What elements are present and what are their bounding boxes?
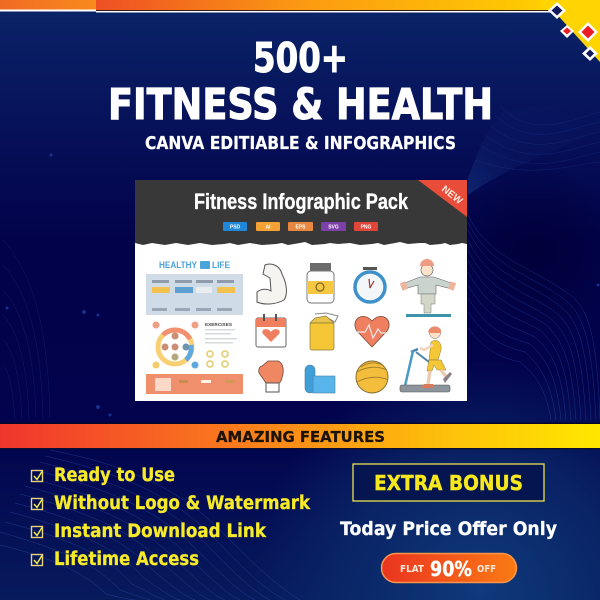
format badges: EPS: [295, 224, 306, 230]
icon: heart with pulse: [355, 316, 389, 347]
title: Fitness & Health: FITNESS & HEALTH: [108, 81, 493, 130]
icon: yoga mat: [305, 365, 335, 393]
offer text: Today Price Offer Only: [340, 518, 558, 540]
format badges: PNG: [361, 224, 372, 230]
icon: boxing glove: [259, 361, 283, 392]
icon: arm: [257, 264, 286, 304]
format badges: AI: [266, 224, 271, 230]
features banner: [0, 422, 600, 450]
discount pill: FLAT: [400, 564, 424, 575]
extra bonus box: [353, 464, 544, 501]
card header with torn edge: [135, 180, 467, 245]
icon: water bottle: [310, 313, 338, 350]
subtitle: CANVA EDITIABLE & INFOGRAPHICS: [145, 133, 456, 154]
card heading: Fitness Infographic Pack: [194, 189, 409, 214]
mini infographic: [146, 260, 243, 394]
icon: calendar: [256, 314, 286, 347]
icon: man with dumbbells: [400, 259, 456, 317]
mini infographic: LIFE: [212, 260, 230, 270]
format badges: [223, 222, 378, 231]
item: ready to use: Ready to Use: [54, 465, 175, 486]
feature list: [32, 465, 311, 570]
item: instant download: Instant Download Link: [54, 521, 267, 542]
icon: supplement jar: [307, 263, 334, 303]
features banner: AMAZING FEATURES: [216, 428, 385, 446]
mini infographic: HEALTHY: [159, 260, 197, 270]
icon: exercise ball: [356, 361, 388, 393]
new ribbon: NEW: [439, 184, 465, 207]
discount pill: OFF: [477, 564, 496, 575]
panel: product preview card: [135, 180, 467, 401]
icon: stopwatch: [355, 267, 385, 302]
icon: runner on treadmill: [400, 326, 452, 392]
item: without logo: Without Logo & Watermark: [54, 493, 311, 514]
title: 500+: 500+: [253, 34, 348, 82]
corner diamonds: [548, 2, 598, 61]
extra bonus box: EXTRA BONUS: [374, 471, 523, 495]
top accent bar: [0, 0, 600, 62]
discount pill: [382, 554, 516, 582]
new ribbon: [418, 180, 467, 217]
format badges: SVG: [328, 224, 339, 230]
item: lifetime access: Lifetime Access: [54, 549, 199, 570]
format badges: PSD: [230, 224, 241, 230]
discount pill: 90%: [430, 557, 472, 581]
mini infographic: EXERCISES: [205, 322, 233, 328]
